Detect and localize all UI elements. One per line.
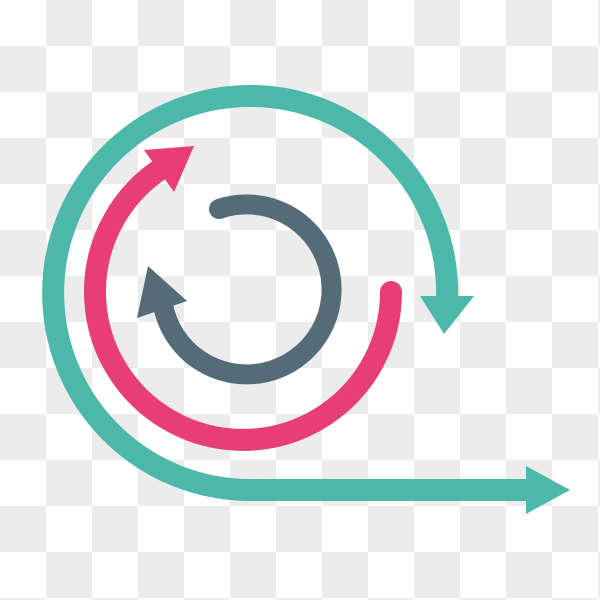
arrow: pink middle circle (95, 146, 391, 440)
arrow: slate inner circle (137, 204, 332, 374)
arrow: teal outer spiral (53, 96, 570, 514)
